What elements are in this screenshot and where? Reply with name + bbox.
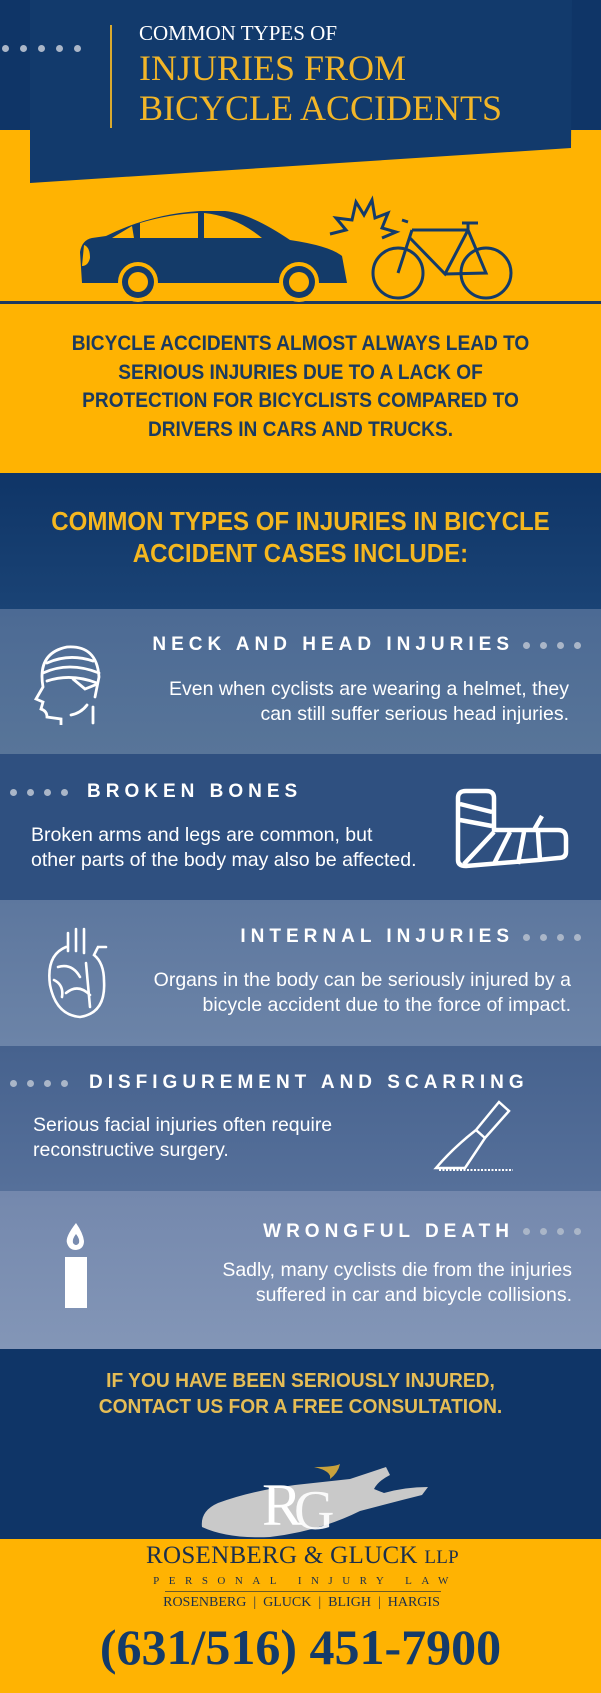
intro text: SERIOUS INJURIES DUE TO A LACK OF — [118, 361, 483, 384]
title: BROKEN BONES — [87, 781, 302, 802]
row: neck and head — [0, 609, 601, 754]
intro text: BICYCLE ACCIDENTS ALMOST ALWAYS LEAD TO — [72, 332, 529, 355]
description: Serious facial injuries often require — [33, 1114, 332, 1136]
description — [169, 678, 569, 725]
description — [33, 1114, 332, 1161]
title panel — [2, 21, 572, 183]
car — [80, 211, 347, 302]
illustration: car hits bicycle — [0, 196, 601, 304]
title: NECK AND HEAD INJURIES — [152, 634, 514, 655]
section heading: ACCIDENT CASES INCLUDE: — [133, 538, 468, 568]
description: other parts of the body may also be affected. — [31, 849, 417, 871]
logo: island map with RG — [202, 1464, 428, 1539]
call to action — [99, 1370, 502, 1418]
section heading: COMMON TYPES OF INJURIES IN BICYCLE — [51, 506, 550, 536]
icon: bandaged head — [34, 646, 100, 725]
description: can still suffer serious head injuries. — [260, 703, 569, 725]
icon: scalpel — [433, 1100, 513, 1171]
road — [0, 301, 601, 304]
decorative dots — [2, 45, 81, 52]
header band — [0, 0, 601, 130]
row: wrongful death — [0, 1191, 601, 1349]
firm name block: PERSONAL INJURY LAW — [153, 1575, 458, 1587]
description: Sadly, many cyclists die from the injuries — [222, 1259, 572, 1281]
section heading — [51, 506, 550, 568]
description: Even when cyclists are wearing a helmet, they — [169, 678, 569, 700]
intro text: PROTECTION FOR BICYCLISTS COMPARED TO — [82, 389, 519, 412]
starburst — [330, 200, 396, 238]
phone number: (631/516) 451-7900 — [100, 1619, 501, 1675]
title text: INJURIES FROM — [139, 48, 406, 88]
row: internal — [0, 900, 601, 1046]
icon: candle — [65, 1223, 87, 1308]
title text: BICYCLE ACCIDENTS — [139, 88, 502, 128]
firm name block: ROSENBERG & GLUCK LLP — [146, 1542, 459, 1569]
description — [222, 1259, 572, 1306]
description: bicycle accident due to the force of impact. — [202, 994, 571, 1016]
description: reconstructive surgery. — [33, 1139, 229, 1161]
title text — [139, 21, 502, 128]
description: Organs in the body can be seriously injured by a — [154, 969, 571, 991]
firm name block: ROSENBERG | GLUCK | BLIGH | HARGIS — [163, 1595, 440, 1610]
intro text: DRIVERS IN CARS AND TRUCKS. — [148, 418, 453, 441]
navy section with heading — [0, 473, 601, 609]
bicycle — [373, 220, 511, 298]
logo: island map with RG: R — [262, 1472, 302, 1538]
icon: cast — [456, 788, 568, 868]
icon: heart — [48, 928, 108, 1018]
row: disfigurement — [0, 1046, 601, 1191]
intro text — [72, 332, 529, 441]
description: Broken arms and legs are common, but — [31, 824, 372, 846]
gold divider — [110, 25, 112, 128]
call to action: IF YOU HAVE BEEN SERIOUSLY INJURED, — [106, 1370, 495, 1392]
description: suffered in car and bicycle collisions. — [256, 1284, 572, 1306]
title: INTERNAL INJURIES — [240, 926, 514, 947]
firm name block — [146, 1542, 459, 1610]
row: broken bones — [0, 754, 601, 900]
description — [154, 969, 571, 1016]
call to action: CONTACT US FOR A FREE CONSULTATION. — [99, 1396, 502, 1418]
title text: COMMON TYPES OF — [139, 21, 337, 45]
description — [31, 824, 417, 871]
title: DISFIGUREMENT AND SCARRING — [89, 1072, 529, 1093]
title: WRONGFUL DEATH — [263, 1221, 514, 1242]
footer navy — [0, 1349, 601, 1539]
